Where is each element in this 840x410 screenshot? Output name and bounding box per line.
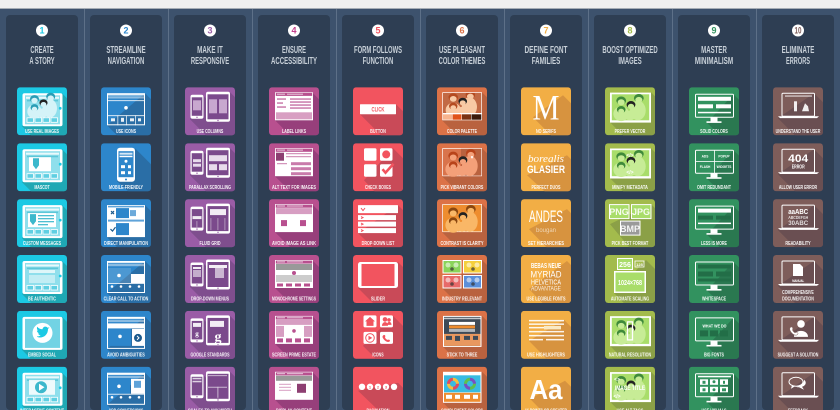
number 1: 1 — [39, 26, 45, 36]
panel: 4 ensure accessibility — [258, 15, 363, 410]
tile: comprehensive documentation: COMPREHENSIVE — [782, 290, 814, 296]
tile: button: BUTTON — [370, 129, 386, 135]
tile: use icons — [101, 87, 195, 175]
tile: allow user error — [773, 143, 840, 224]
tile: mascot — [17, 143, 112, 232]
tile: fluid grid — [185, 199, 280, 283]
tile: use highlighters — [521, 310, 571, 359]
tile: omit redundant: OMIT REDUNDANT — [697, 185, 731, 191]
tile: set hierarchies — [521, 199, 571, 248]
tile: pick best format: PNG — [609, 207, 629, 217]
tile: automate scaling: AUTOMATE SCALING — [611, 297, 649, 303]
tile: pick best format — [605, 199, 655, 248]
tile: omit redundant: FLASH — [700, 165, 711, 169]
number 5 — [372, 24, 384, 36]
tile: use legible fonts — [521, 255, 571, 303]
tile: big fonts — [689, 311, 784, 396]
tile: interactive content — [17, 367, 112, 410]
tile: use legible fonts: ADVANTAGE — [531, 286, 561, 292]
tile: use legible fonts: BEBAS NEUE — [531, 261, 561, 270]
tile: pagination — [353, 366, 403, 410]
tile: pick best format: BMP — [620, 224, 640, 234]
tile: label links: LABEL LINKS — [282, 129, 306, 135]
number 7 — [540, 24, 552, 36]
panel: 1 create a story — [6, 15, 78, 410]
tile: automate scaling: 1024×768 — [618, 280, 642, 287]
tile: natural resolution: NATURAL RESOLUTION — [609, 353, 651, 359]
heading — [524, 44, 568, 67]
tile: contrast is clarity — [437, 199, 532, 282]
number 4: 4 — [291, 26, 297, 36]
tile: pagination: 3 — [385, 384, 388, 389]
tile: solid colors: SOLID COLORS — [700, 129, 728, 135]
tile: use visuals — [689, 367, 784, 410]
tile: parallax scrolling: PARALLAX SCROLLING — [189, 185, 231, 191]
tile: pick vibrant colors: PICK VIBRANT COLORS — [441, 185, 484, 191]
tile: set hierarchies: ANDES — [529, 207, 563, 226]
tile: use alt tags: <> — [614, 377, 620, 383]
tile: pick best format: JPG — [632, 207, 650, 217]
heading: RESPONSIVE — [191, 55, 229, 67]
tile: screen prime estate — [269, 311, 363, 394]
tile: be authentic — [17, 255, 112, 344]
tile: use icons: USE ICONS — [116, 129, 136, 135]
tile: drop-down list: DROP-DOWN LIST — [362, 241, 395, 247]
number 5: 5 — [375, 26, 381, 36]
tile: avoid image as link: AVOID IMAGE AS LINK — [272, 241, 316, 247]
number 8: 8 — [627, 26, 633, 36]
tile: check boxes — [353, 143, 403, 192]
tile: complement colors — [437, 366, 487, 410]
tile: comprehensive documentation — [773, 255, 840, 336]
number 10: 10 — [794, 26, 802, 36]
tile: omit redundant: WIDGETS — [717, 165, 731, 169]
tile: use columns: USE COLUMNS — [197, 129, 224, 135]
tile: pick vibrant colors — [437, 143, 532, 226]
tile: whitespace — [689, 255, 784, 340]
tile: color palette: COLOR PALETTE — [447, 129, 477, 135]
tile: slider: SLIDER — [371, 297, 385, 303]
tile: prefer vector — [605, 87, 701, 172]
tile: less is more: LESS IS MORE — [701, 241, 727, 247]
tile: stick to three: STICK TO THREE — [447, 353, 478, 359]
tile: color palette — [437, 87, 532, 170]
tile: display content — [269, 367, 363, 410]
tile: stick to three — [437, 310, 487, 359]
tile: big fonts: BIG FONTS — [704, 353, 724, 359]
tile: readability: READABILITY — [785, 241, 811, 247]
tile: check boxes: CHECK BOXES — [365, 185, 391, 191]
tile: clear call to action — [101, 255, 195, 343]
tile: embed social: EMBED SOCIAL — [28, 353, 56, 359]
number 2 — [120, 24, 132, 36]
heading: ACCESSIBILITY — [271, 55, 317, 67]
column separators — [84, 9, 757, 410]
heading — [191, 44, 229, 67]
heading: FAMILIES — [532, 55, 560, 67]
heading — [29, 44, 55, 67]
tile: big fonts: WHAT WE DO — [702, 323, 727, 328]
number 9 — [708, 24, 720, 36]
tile: 16 points or greater: Aa — [530, 374, 563, 405]
number 6: 6 — [459, 26, 465, 36]
tile: perfect duos — [521, 143, 571, 192]
tile: 16 points or greater — [521, 366, 571, 410]
heading: MAKE IT — [197, 44, 223, 56]
heading — [695, 44, 733, 67]
heading: ELIMINATE — [782, 44, 814, 56]
tile: use real images — [17, 87, 112, 176]
tile: google standards: g — [214, 330, 222, 345]
tile: use legible fonts: MYRIAD — [530, 270, 562, 280]
tile: allow user error: 404 — [788, 153, 809, 165]
tile: pagination: 2 — [377, 384, 380, 389]
tile: alt text for images: ALT TEXT FOR IMAGES — [272, 185, 316, 191]
tile: automate scaling: 128 — [636, 262, 644, 267]
tile: omit redundant: ADS — [702, 155, 708, 159]
tile: less is more — [689, 199, 784, 284]
heading: ENSURE — [282, 44, 306, 56]
tile: button: CLICK — [372, 108, 385, 114]
tile: comprehensive documentation: MANUAL — [792, 278, 805, 283]
panel: 7 define font families — [510, 15, 582, 410]
tile: pick best format: PICK BEST FORMAT — [612, 241, 649, 247]
tile: natural resolution — [605, 311, 701, 396]
tile: feedback — [773, 367, 840, 410]
tile: understand the user: UNDERSTAND THE USER — [776, 129, 820, 135]
tile: mascot: MASCOT — [34, 185, 50, 191]
tile: use legible fonts: USE LEGIBLE FONTS — [526, 297, 566, 303]
tile: direct manipulation: DIRECT MANIPULATION — [104, 241, 148, 247]
tile: button — [353, 87, 403, 136]
heading: COLOR THEMES — [439, 55, 485, 67]
panel: 10 eliminate errors — [762, 15, 840, 410]
tile: drop-down menus — [185, 255, 280, 339]
tile: avoid ambiguities — [101, 311, 195, 399]
tile: custom messages — [17, 199, 112, 288]
tile: minify metadata: MINIFY METADATA — [612, 185, 648, 191]
tile: google standards — [185, 311, 280, 395]
tile: understand the user — [773, 87, 840, 168]
panel: 2 streamline navigation — [90, 15, 162, 410]
tile: monochrome settings: MONOCHROME SETTINGS — [272, 297, 316, 303]
heading — [106, 44, 146, 67]
tile: scales to any width — [185, 367, 280, 410]
tile: automate scaling — [605, 255, 655, 303]
panel: 6 use pleasant color themes — [426, 15, 498, 410]
tile: set hierarchies: SET HIERARCHIES — [528, 241, 564, 247]
number 3: 3 — [207, 26, 213, 36]
tile: use legible fonts: HELVETICA — [531, 280, 561, 286]
tile: clear call to action: CLEAR CALL TO ACTION — [104, 297, 148, 303]
tile: allow user error: ALLOW USER ERROR — [779, 185, 817, 191]
tile: perfect duos: GLASIER — [527, 164, 565, 176]
tile: mobile-friendly: MOBILE-FRIENDLY — [109, 185, 143, 191]
heading: USE PLEASANT — [439, 44, 485, 56]
tile: direct manipulation — [101, 199, 151, 248]
tile: readability: ABCDEFGH — [788, 215, 808, 220]
tile: automate scaling: 256 — [619, 262, 631, 269]
tile: embed social — [17, 310, 67, 359]
tile: icons: ICONS — [372, 353, 384, 359]
heading: NAVIGATION — [108, 55, 144, 67]
tile: be authentic: BE AUTHENTIC — [28, 297, 56, 303]
tile: avoid ambiguities: AVOID AMBIGUITIES — [107, 353, 145, 359]
number 10 — [792, 24, 804, 36]
heading: ERRORS — [786, 55, 810, 67]
tile: add conversions — [101, 367, 195, 410]
number 8 — [624, 24, 636, 36]
tile: google standards: GOOGLE STANDARDS — [190, 353, 230, 359]
tile: no serifs: NO SERIFS — [536, 129, 556, 135]
number 2: 2 — [123, 26, 129, 36]
tile: industry relevant — [437, 255, 487, 303]
tile: allow user error: ERROR — [792, 165, 805, 171]
tile: omit redundant: POPUP — [718, 155, 730, 159]
tile: no serifs: M — [532, 87, 560, 127]
heading: BOOST OPTIMIZED — [602, 44, 658, 56]
heading: DEFINE FONT — [524, 44, 568, 56]
number 6 — [456, 24, 468, 36]
heading: FUNCTION — [363, 55, 393, 67]
tile: screen prime estate: SCREEN PRIME ESTATE — [272, 353, 316, 359]
tile: readability — [773, 199, 840, 280]
panel: 8 boost optimized images — [594, 15, 666, 410]
tile: industry relevant: INDUSTRY RELEVANT — [442, 297, 482, 303]
tile: avoid image as link — [269, 199, 363, 282]
heading — [354, 44, 402, 67]
tile: contrast is clarity: CONTRAST IS CLARITY — [440, 241, 484, 247]
number 4 — [288, 24, 300, 36]
panel: 3 make it responsive — [174, 15, 280, 410]
tile: mobile-friendly — [101, 143, 151, 192]
heading: FORM FOLLOWS — [354, 44, 402, 56]
tile: minify metadata: </> — [626, 153, 634, 159]
heading: MINIMALISM — [695, 55, 733, 67]
tile: whitespace: WHITESPACE — [702, 297, 726, 303]
tile: readability: aaABC — [788, 209, 808, 216]
tile: omit redundant — [689, 143, 784, 228]
tile: custom messages: CUSTOM MESSAGES — [23, 241, 61, 247]
tile: minify metadata — [605, 143, 701, 228]
heading: CREATE — [30, 44, 54, 56]
tile: drop-down list — [353, 199, 403, 248]
tile: perfect duos: borealis — [528, 153, 564, 165]
tile: use real images: USE REAL IMAGES — [25, 129, 59, 135]
tile: minify metadata: </> — [626, 170, 634, 176]
tile: label links — [269, 87, 363, 170]
tile: slider — [353, 255, 403, 303]
tile: fluid grid: FLUID GRID — [200, 241, 221, 247]
tile: drop-down menus: DROP-DOWN MENUS — [191, 297, 229, 303]
panel: 9 master minimalism — [678, 15, 784, 410]
tile: icons — [353, 310, 403, 359]
tile: google standards: g — [195, 330, 199, 338]
tile: suggest a solution — [773, 311, 840, 392]
tile: prefer vector: PREFER VECTOR — [615, 129, 645, 135]
panel: 5 form follows function — [342, 15, 414, 410]
number 1 — [36, 24, 48, 36]
heading — [439, 44, 485, 67]
heading: IMAGES — [618, 55, 642, 67]
tile: monochrome settings — [269, 255, 363, 338]
tile: use alt tags: </> — [613, 394, 621, 400]
tile: suggest a solution: SUGGEST A SOLUTION — [778, 353, 818, 359]
number 9: 9 — [711, 26, 717, 36]
tile: use alt tags: IMAGE TITLE — [615, 386, 645, 392]
tile: use alt tags — [605, 367, 701, 410]
heading: A STORY — [29, 55, 55, 67]
tile: no serifs — [521, 87, 571, 136]
tile: pagination: 1 — [369, 384, 372, 389]
heading — [602, 44, 658, 67]
number 3 — [204, 24, 216, 36]
tile: perfect duos: PERFECT DUOS — [532, 185, 561, 191]
tile: comprehensive documentation: DOCUMENTATION — [782, 296, 814, 302]
tile: parallax scrolling — [185, 143, 280, 227]
tile: readability: 30ABC — [788, 220, 808, 227]
heading: MASTER — [701, 44, 727, 56]
tile: set hierarchies: bougan — [536, 228, 556, 234]
tile: use columns — [185, 87, 280, 171]
tile: use highlighters: USE HIGHLIGHTERS — [527, 353, 565, 359]
tile: alt text for images — [269, 143, 363, 226]
number 7: 7 — [543, 26, 549, 36]
heading — [271, 44, 317, 67]
heading: STREAMLINE — [106, 44, 146, 56]
tile: solid colors — [689, 87, 784, 172]
heading — [782, 44, 814, 67]
